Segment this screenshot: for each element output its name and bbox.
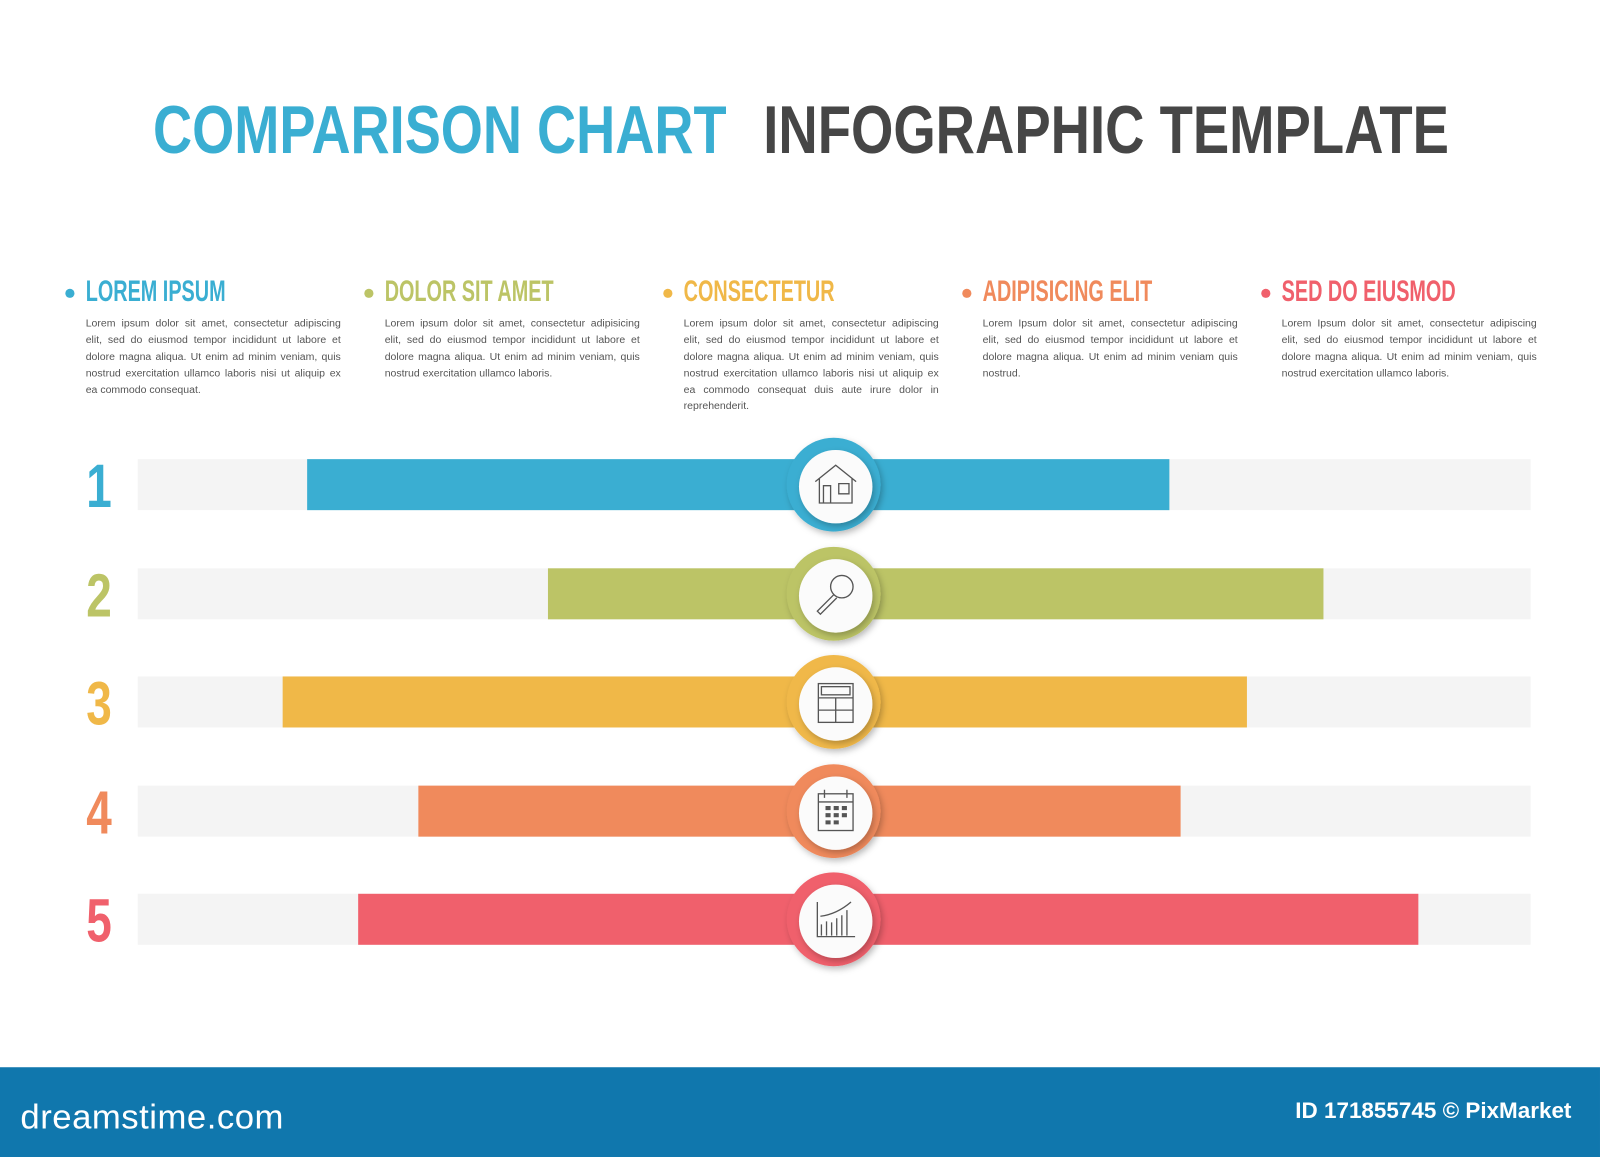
text: ADIPISICING ELIT [983, 275, 1152, 308]
text: DOLOR SIT AMET [385, 275, 554, 308]
row 1 [86, 438, 1531, 532]
row 4: 4 [86, 779, 112, 847]
footer logo: dreamstime.com [20, 1098, 284, 1137]
row 2 [86, 547, 1531, 641]
text: Lorem ipsum dolor sit amet, consectetur adipisicing elit, sed do eiusmod tempor incididunt ut labore et dolore magna aliqua. Ut enim ad minim veniam, quis nostrud exercitation ullamco laboris. [385, 318, 640, 379]
title: INFOGRAPHIC TEMPLATE [763, 93, 1449, 168]
footer id: ID 171855745 © PixMarket [1295, 1098, 1571, 1123]
icon: calculator [818, 684, 853, 722]
row 3: 3 [86, 670, 112, 738]
row 3 [86, 655, 1531, 749]
icon: chart [817, 902, 855, 937]
column 4 [962, 275, 1238, 379]
row 5: 5 [86, 887, 112, 955]
row 5 [86, 872, 1531, 966]
text: Lorem ipsum dolor sit amet, consectetur adipiscing elit, sed do eiusmod tempor incididunt ut labore et dolore magna aliqua. Ut enim ad minim veniam, quis nostrud exercitation ullamco laboris nisi ut aliquip ex ea commodo consequat. [86, 318, 341, 396]
bar chart [86, 438, 1530, 972]
row 4 [86, 764, 1531, 858]
text: LOREM IPSUM [86, 275, 226, 308]
icon: calendar [818, 790, 853, 831]
row 2: 2 [86, 562, 112, 630]
icon: house [815, 465, 856, 503]
column 3 [663, 275, 939, 413]
text: Lorem ipsum dolor sit amet, consectetur adipiscing elit, sed do eiusmod tempor incididunt ut labore et dolore magna aliqua. Ut enim ad minim veniam, quis nostrud exercitation ullamco laboris nisi ut aliquip ex ea commodo consequat duis aute irure dolor in reprehenderit. [684, 318, 939, 413]
footer [0, 1067, 1600, 1157]
column 1 [65, 275, 341, 396]
text: Lorem Ipsum dolor sit amet, consectetur adipiscing elit, sed do eiusmod tempor incididunt ut labore et dolore magna aliqua. Ut enim ad minim veniam quis nostrud. [983, 318, 1238, 379]
column 2 [364, 275, 640, 379]
text: SED DO EIUSMOD [1282, 275, 1456, 308]
text: CONSECTETUR [684, 275, 835, 308]
row 1: 1 [86, 453, 112, 521]
column 5 [1261, 275, 1537, 379]
text: Lorem Ipsum dolor sit amet, consectetur adipiscing elit, sed do eiusmod tempor incididunt ut labore et dolore magna aliqua. Ut enim ad minim veniam, quis nostrud exercitation ullamco laboris. [1282, 318, 1537, 379]
icon: magnifier [817, 575, 853, 614]
title [153, 93, 1449, 168]
title: COMPARISON CHART [153, 93, 727, 168]
